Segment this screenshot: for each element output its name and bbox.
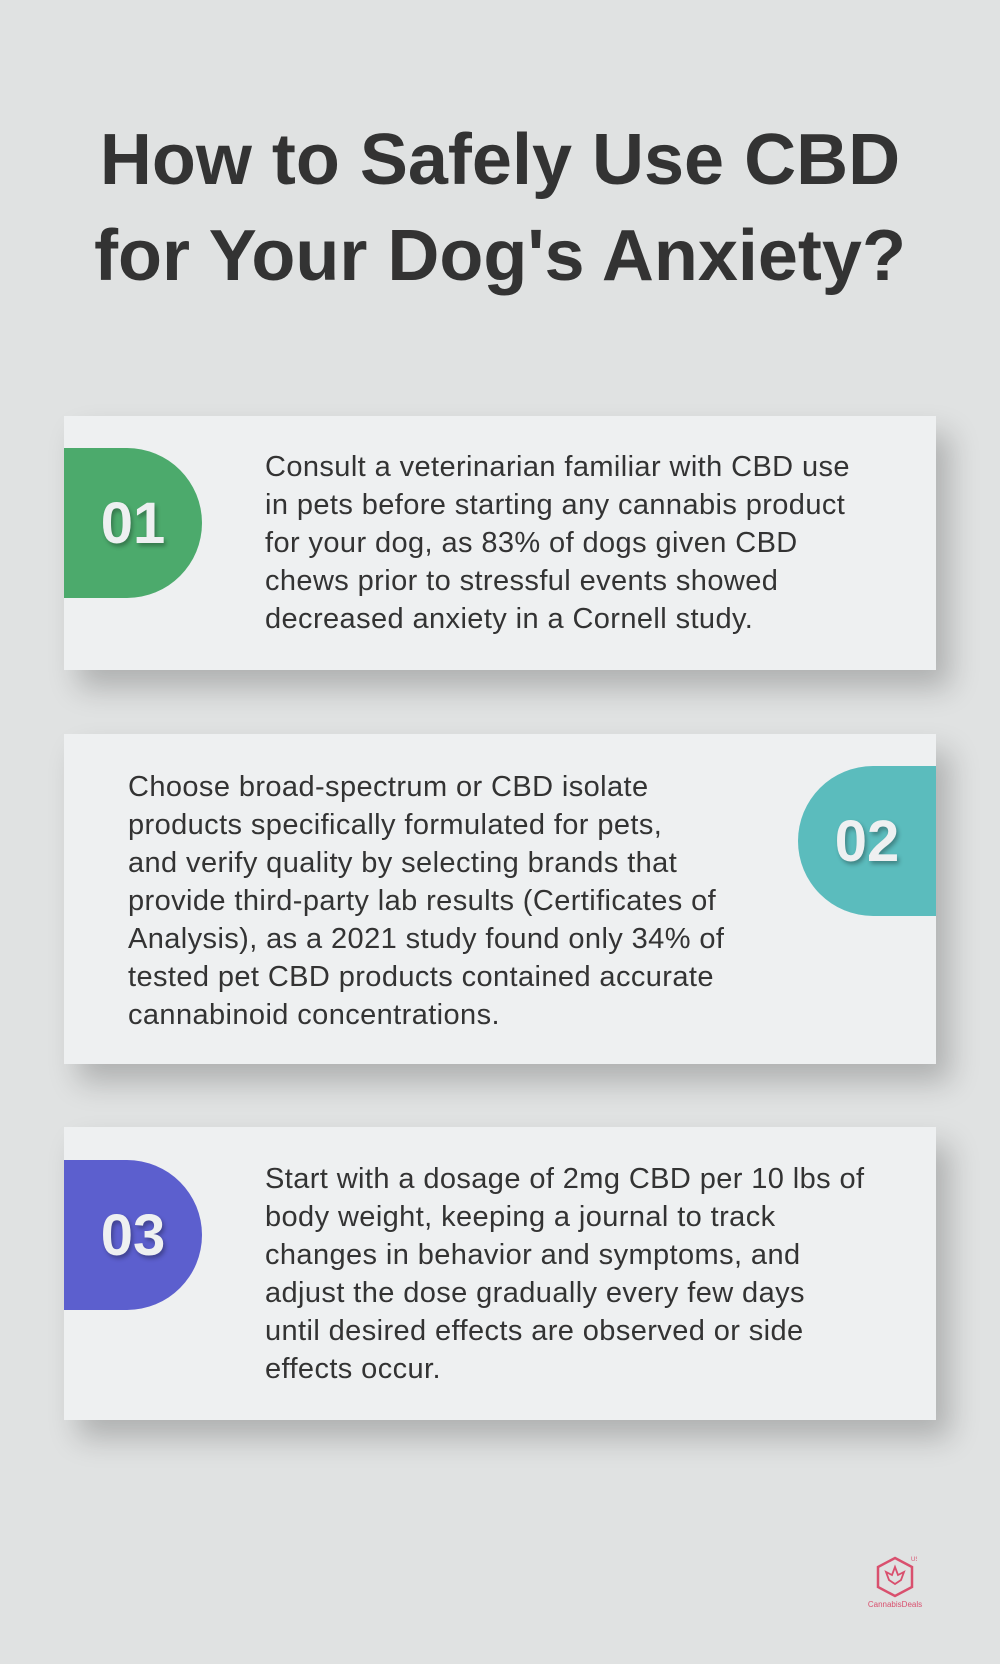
text: step 1: Consult a veterinarian familiar with CBD use bbox=[265, 451, 850, 483]
text: step 2: cannabinoid concentrations. bbox=[128, 999, 500, 1031]
title: How to Safely Use CBD bbox=[100, 120, 900, 200]
panel: step 1 bbox=[64, 416, 936, 670]
text: step 3: changes in behavior and symptoms, and bbox=[265, 1239, 800, 1271]
text: step 3: adjust the dose gradually every few days bbox=[265, 1277, 805, 1309]
title bbox=[94, 120, 906, 296]
text: step 3: body weight, keeping a journal to track bbox=[265, 1201, 776, 1233]
text: step 1: chews prior to stressful events showed bbox=[265, 565, 778, 597]
text: step 2: products specifically formulated for pets, bbox=[128, 809, 662, 841]
panel: step 3 bbox=[64, 1127, 936, 1420]
text: step 1 bbox=[265, 451, 850, 635]
text: step 3 bbox=[265, 1163, 865, 1385]
text: step 3: Start with a dosage of 2mg CBD per 10 lbs of bbox=[265, 1163, 865, 1195]
title: for Your Dog's Anxiety? bbox=[94, 216, 906, 296]
text: step 2: provide third-party lab results (Certificates of bbox=[128, 885, 716, 917]
logo: CannabisDeals bbox=[868, 1600, 922, 1609]
badge 02: 02 bbox=[835, 808, 899, 874]
badge 01 bbox=[64, 448, 202, 598]
panel: step 2 bbox=[64, 734, 936, 1064]
text: step 1: in pets before starting any cannabis product bbox=[265, 489, 845, 521]
text: step 1: decreased anxiety in a Cornell study. bbox=[265, 603, 753, 635]
badge 03 bbox=[64, 1160, 202, 1310]
badge 03: 03 bbox=[101, 1202, 165, 1268]
text: step 2: Analysis), as a 2021 study found only 34% of bbox=[128, 923, 724, 955]
text: step 1: for your dog, as 83% of dogs given CBD bbox=[265, 527, 798, 559]
text: step 3: until desired effects are observed or side bbox=[265, 1315, 804, 1347]
text: step 2: and verify quality by selecting brands that bbox=[128, 847, 677, 879]
badge 01: 01 bbox=[101, 490, 165, 556]
text: step 3: effects occur. bbox=[265, 1353, 441, 1385]
badge 02 bbox=[798, 766, 936, 916]
text: step 2: Choose broad-spectrum or CBD isolate bbox=[128, 771, 649, 803]
text: step 2 bbox=[128, 771, 724, 1031]
logo bbox=[868, 1556, 922, 1609]
text: step 2: tested pet CBD products contained accurate bbox=[128, 961, 714, 993]
